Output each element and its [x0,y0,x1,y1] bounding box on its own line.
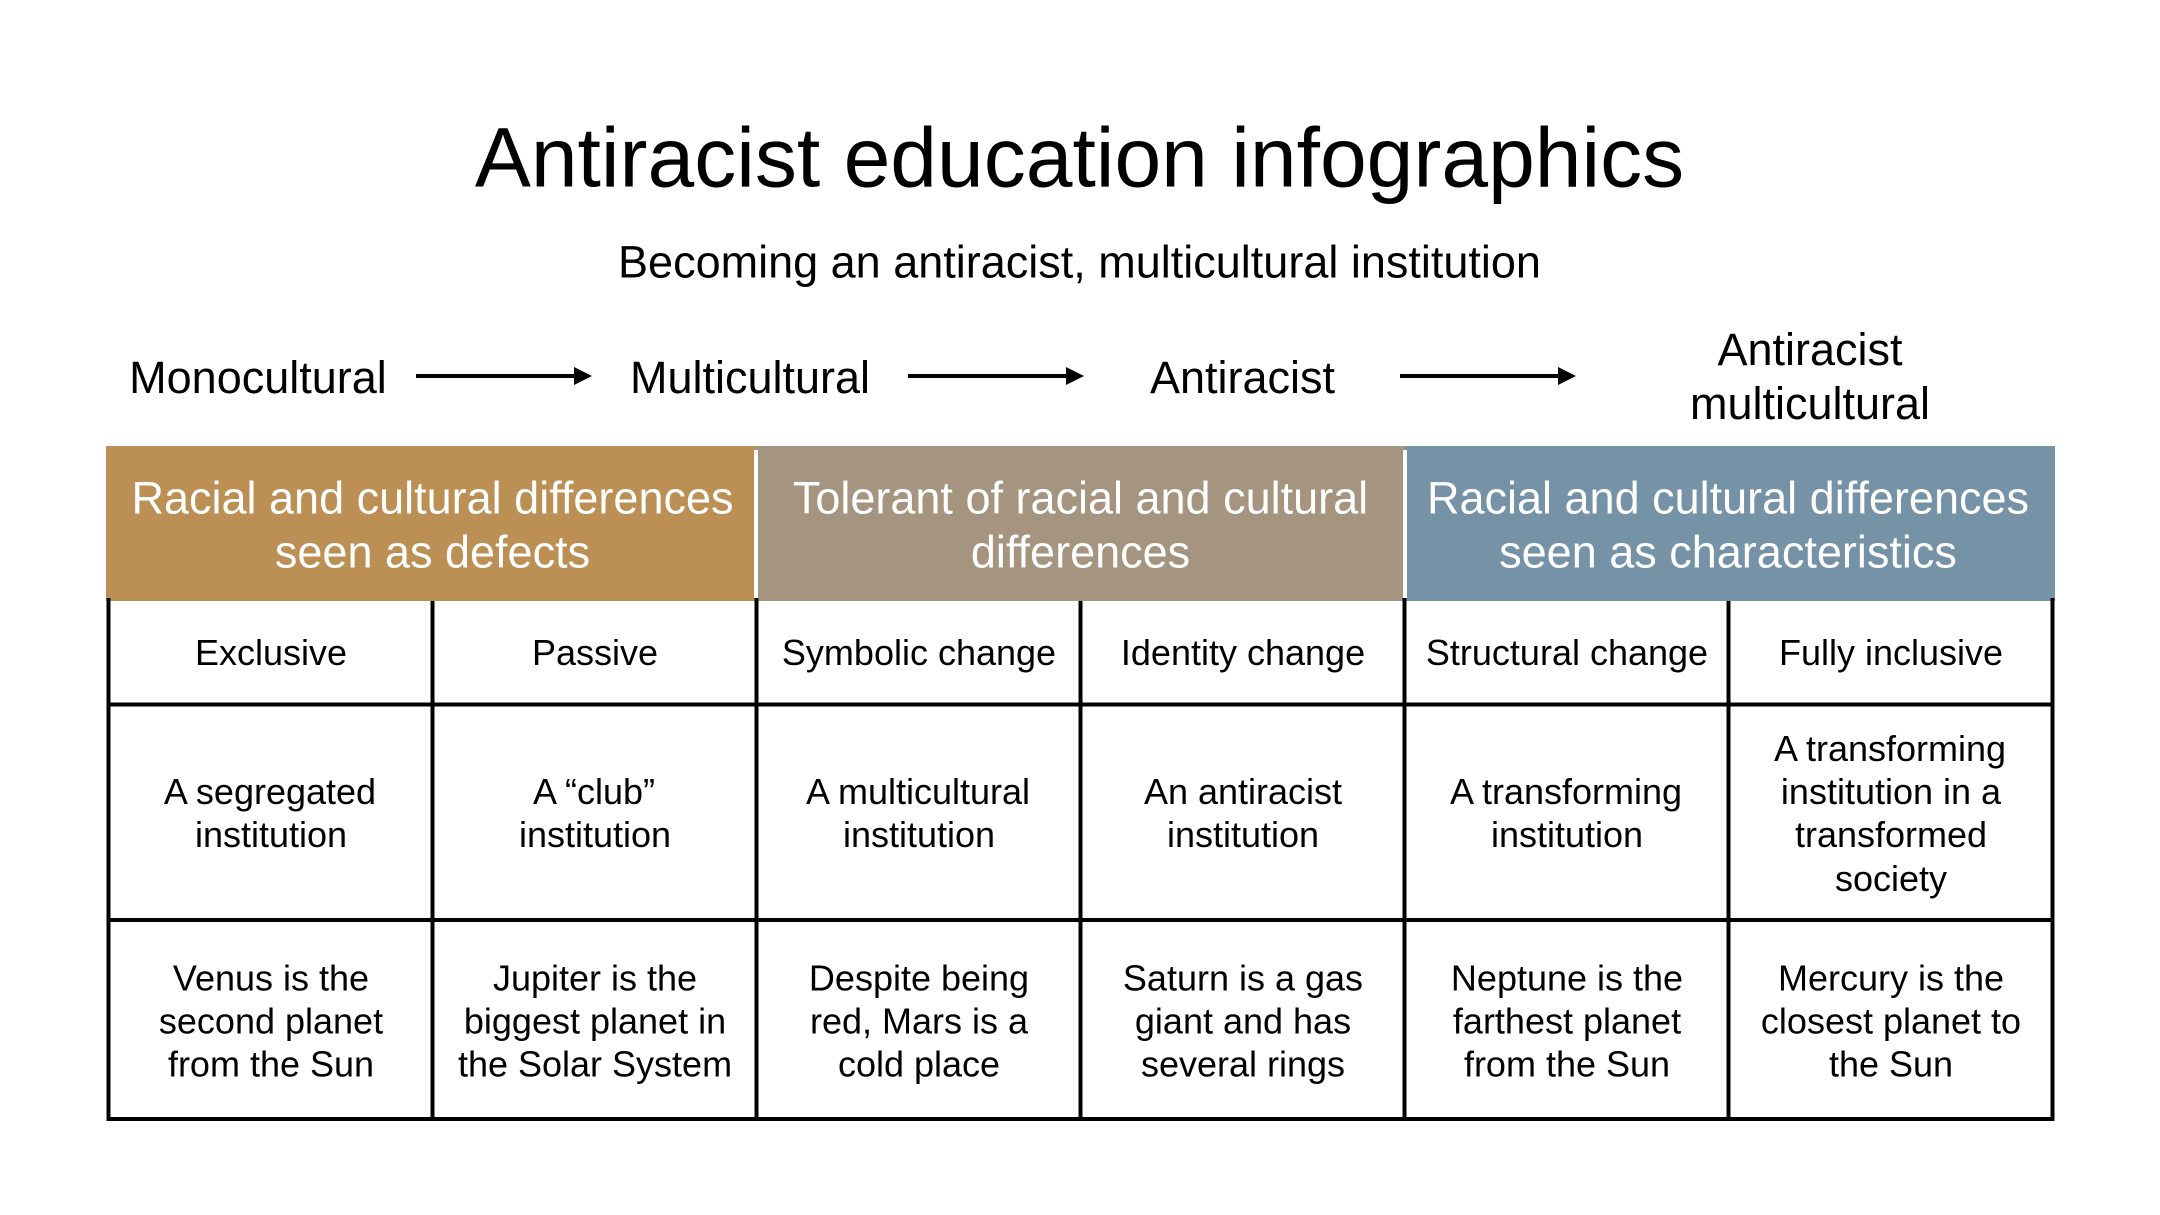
row: change stage labels: Exclusive [195,632,347,673]
row: institution types [164,728,2006,899]
row: institution types: institution [1491,814,1643,855]
stage: Multicultural: Multicultural [630,352,870,403]
white separators between header blocks [754,450,1407,598]
row: change stage labels: Passive [532,632,658,673]
header: seen as defects: seen as defects [275,526,590,578]
row: institution types: institution [843,814,995,855]
row: change stage labels: Fully inclusive [1779,632,2003,673]
row: institution types: institution [1167,814,1319,855]
stage: Monocultural: Monocultural [129,352,387,403]
row: institution types: society [1835,858,1947,899]
stage: Antiracist multicultural [1690,324,1930,429]
arrow: Antiracist to Antiracist multicultural [1400,367,1576,385]
row: planet descriptions: farthest planet [1453,1000,1681,1042]
row: change stage labels: Structural change [1426,632,1708,673]
row: institution types: A segregated [164,771,376,812]
row: change stage labels: Identity change [1121,632,1365,673]
header: seen as defects [106,446,756,601]
row: planet descriptions [159,958,2021,1084]
row: planet descriptions: several rings [1141,1044,1345,1084]
row: planet descriptions: from the Sun [1464,1044,1670,1084]
subtitle: Becoming an antiracist, multicultural institution [618,236,1541,288]
row: planet descriptions: biggest planet in [464,1000,726,1042]
header: tolerant: Tolerant of racial and cultural [793,472,1368,524]
header: seen as characteristics [1405,446,2055,601]
row: institution types: A transforming [1774,728,2006,769]
row: institution types: transformed [1795,814,1987,855]
stage: Antiracist: Antiracist [1150,352,1336,403]
row: institution types: A “club” [533,771,655,812]
row: planet descriptions: Despite being [809,958,1029,998]
row: change stage labels [195,632,2003,673]
row: planet descriptions: Mercury is the [1778,958,2004,998]
row: institution types: An antiracist [1144,771,1342,812]
header: tolerant: differences [971,526,1190,578]
row: institution types: institution [519,814,671,855]
row: planet descriptions: Neptune is the [1451,958,1683,998]
header: tolerant [756,446,1405,601]
row: change stage labels: Symbolic change [782,632,1056,673]
row: planet descriptions: the Solar System [458,1044,732,1084]
row: planet descriptions: from the Sun [168,1044,374,1084]
header: seen as defects: Racial and cultural differences [131,472,734,524]
stage: Antiracist multicultural: multicultural [1690,378,1930,429]
stage: Antiracist multicultural: Antiracist [1717,324,1903,375]
row: planet descriptions: closest planet to [1761,1000,2021,1042]
row: institution types: institution in a [1781,771,2002,812]
row: planet descriptions: cold place [838,1044,1000,1084]
row: institution types: A transforming [1450,771,1682,812]
row: planet descriptions: second planet [159,1000,383,1042]
arrow: Monocultural to Multicultural [416,367,592,385]
row: institution types: A multicultural [806,771,1030,812]
table grid [107,598,2054,1121]
row: planet descriptions: Jupiter is the [493,958,697,998]
header: seen as characteristics: seen as characteristics [1499,526,1957,578]
arrow: Multicultural to Antiracist [908,367,1084,385]
row: planet descriptions: Venus is the [173,958,369,998]
row: planet descriptions: Saturn is a gas [1123,958,1363,998]
row: planet descriptions: the Sun [1829,1044,1953,1084]
row: planet descriptions: giant and has [1135,1000,1351,1042]
header: seen as characteristics: Racial and cultural differences [1427,472,2029,524]
row: institution types: institution [195,814,347,855]
panel: header band [106,446,2055,601]
title: Antiracist education infographics [475,110,1684,204]
row: planet descriptions: red, Mars is a [810,1000,1029,1042]
